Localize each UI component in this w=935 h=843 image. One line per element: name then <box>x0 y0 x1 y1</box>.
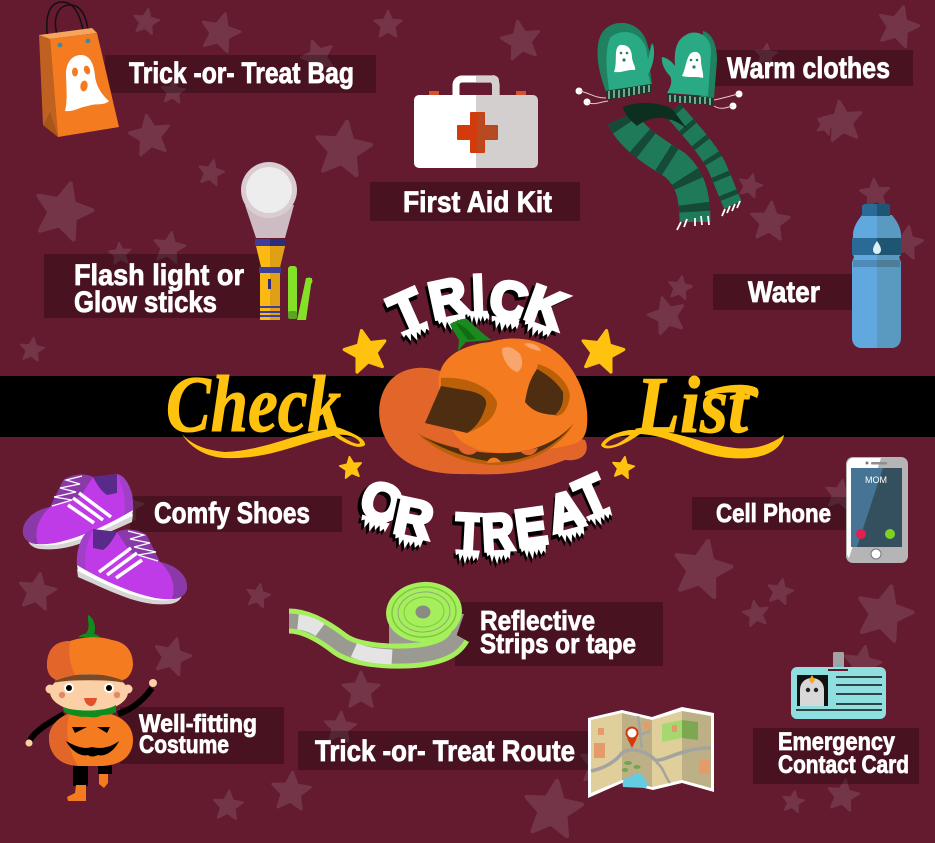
or treat lettering <box>349 463 619 569</box>
or treat lettering: R <box>389 487 438 551</box>
list script: List <box>635 362 750 450</box>
label bar <box>105 55 376 93</box>
or treat lettering: A <box>540 483 589 548</box>
item: well-fitting costume <box>26 615 284 801</box>
label bar <box>44 254 265 318</box>
check script: Check <box>166 361 341 449</box>
black title band <box>0 376 935 437</box>
or treat lettering: E <box>509 501 548 563</box>
or treat lettering: E <box>512 497 551 558</box>
label text: Contact Card <box>778 751 909 779</box>
label text: Well-fitting <box>139 710 257 738</box>
central title: check list pumpkin <box>166 263 784 569</box>
label text: Reflective <box>480 605 595 636</box>
or treat lettering: T <box>454 503 484 563</box>
icon: scarf <box>622 103 740 230</box>
or treat lettering: R <box>478 507 513 567</box>
trick lettering: R <box>422 271 471 336</box>
or treat lettering: T <box>451 507 481 566</box>
label text: Emergency <box>778 728 895 756</box>
or treat lettering: R <box>386 490 434 555</box>
icon: glow sticks <box>288 266 312 320</box>
trick lettering: I <box>471 263 485 322</box>
item: reflective strips or tape <box>289 579 663 666</box>
trick lettering: R <box>424 267 473 331</box>
yellow stars <box>339 326 636 479</box>
pumpkin <box>379 319 587 474</box>
icon: orange ghost bag <box>39 2 119 137</box>
trick lettering: T <box>381 278 434 344</box>
icon: flashlight <box>241 162 297 320</box>
item: trick-or-treat route <box>298 707 714 798</box>
item: trick-or-treat bag <box>39 2 376 137</box>
trick lettering: K <box>518 274 574 342</box>
label text <box>139 710 257 759</box>
label bar <box>715 50 913 86</box>
trick lettering: K <box>514 277 569 344</box>
label text: Trick -or- Treat Bag <box>129 57 354 90</box>
icon: first aid case <box>414 75 538 168</box>
label text: Flash light or <box>74 259 244 292</box>
label text <box>74 259 244 319</box>
label text: Water <box>748 276 820 309</box>
icon: left mitten <box>576 23 654 106</box>
list script <box>601 362 784 458</box>
label text: Strips or tape <box>480 628 636 659</box>
item: emergency contact card <box>753 652 919 784</box>
or treat lettering: O <box>353 469 410 537</box>
item: comfy shoes <box>23 474 342 604</box>
label bar <box>130 496 342 532</box>
icon: folded map <box>588 707 714 798</box>
trick lettering <box>378 263 574 351</box>
icon: water bottle <box>852 204 901 348</box>
icon: id card <box>791 652 886 719</box>
or treat lettering: T <box>566 463 616 528</box>
label text: Cell Phone <box>716 498 831 528</box>
icon: child in pumpkin costume <box>26 615 157 801</box>
label text: Glow sticks <box>74 286 217 319</box>
label text: Costume <box>139 731 229 759</box>
or treat lettering: T <box>566 468 615 533</box>
label bar <box>455 602 663 666</box>
label bar <box>692 497 850 530</box>
icon: smartphone: MOM <box>865 475 887 485</box>
icon: right mitten <box>662 31 742 110</box>
trick lettering: C <box>486 270 531 332</box>
label text: Warm clothes <box>727 52 890 85</box>
or treat lettering: R <box>481 503 516 563</box>
label text <box>778 728 909 779</box>
or treat lettering: O <box>349 472 406 540</box>
label bar <box>298 731 590 770</box>
label bar <box>753 728 919 784</box>
label bar <box>713 274 855 310</box>
trick lettering: I <box>469 267 483 326</box>
trick lettering: C <box>483 273 528 336</box>
label bar <box>370 182 580 221</box>
label text: First Aid Kit <box>403 186 552 219</box>
label bar <box>120 707 284 764</box>
item: water <box>713 204 901 348</box>
item: cell phone <box>692 457 908 563</box>
trick lettering: T <box>380 283 433 349</box>
icon: tape roll <box>289 579 464 657</box>
label text: Trick -or- Treat Route <box>315 735 575 768</box>
label text <box>480 605 636 659</box>
icon: shoe two <box>77 529 187 604</box>
item: first aid kit <box>370 75 580 221</box>
item: warm clothes <box>576 23 913 230</box>
icon: smartphone <box>846 457 908 563</box>
label text: Comfy Shoes <box>154 497 310 530</box>
or treat lettering: A <box>541 478 591 544</box>
item: flash light or glow sticks <box>44 162 312 320</box>
icon: shoe one <box>23 474 133 549</box>
